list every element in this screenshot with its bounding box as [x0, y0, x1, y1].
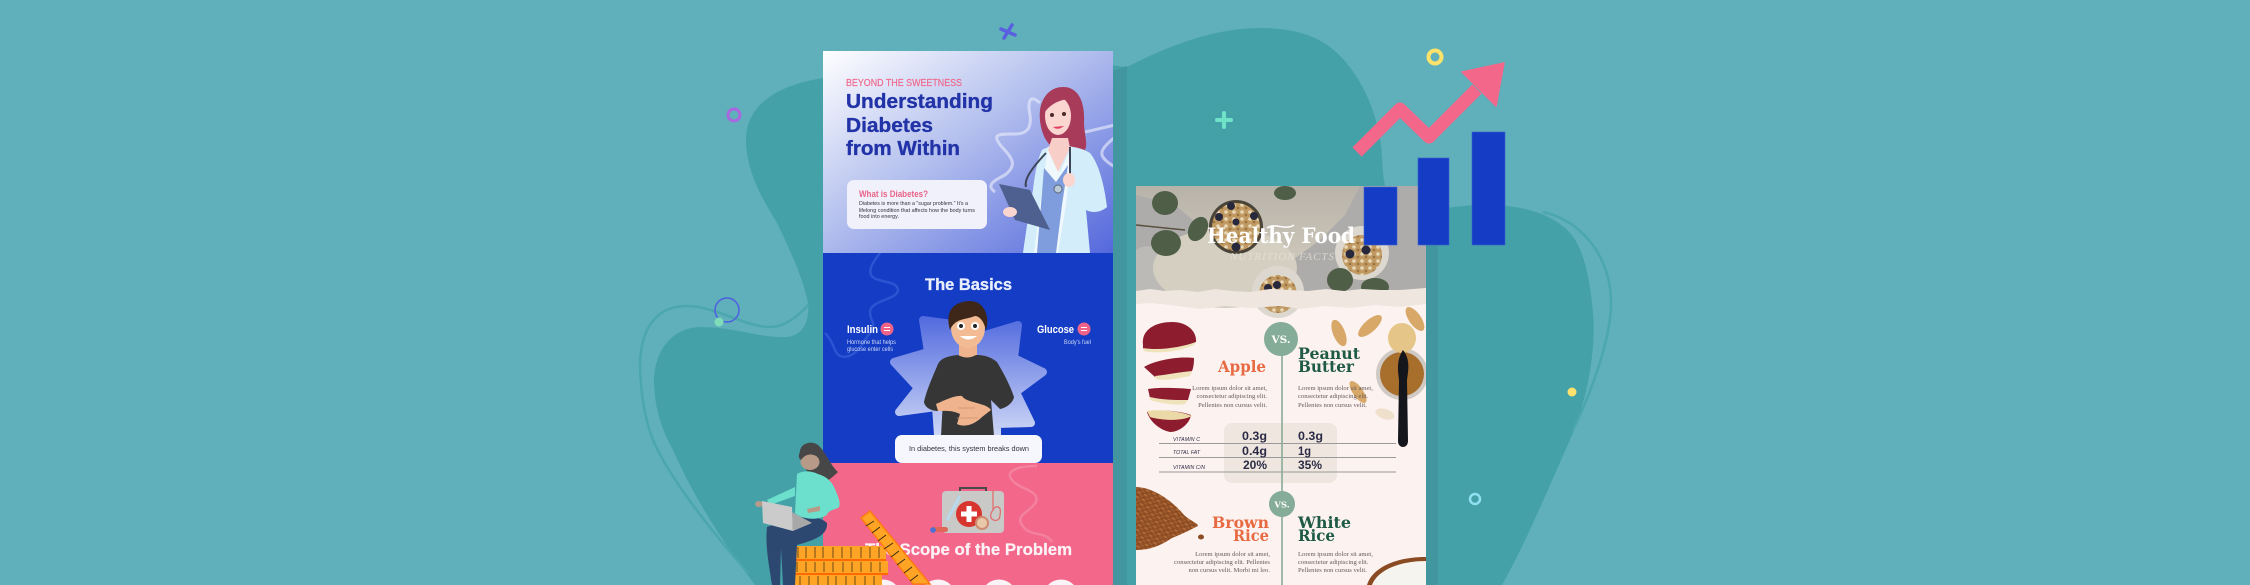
- callout: system breaks down: [895, 435, 1042, 463]
- text: white rice description: Lorem ipsum dolor sit amet,: [1298, 551, 1373, 558]
- table labels: VITAMIN C: [1173, 437, 1200, 443]
- heading: apple: Apple: [1217, 357, 1266, 376]
- heading: peanut butter: [1298, 348, 1360, 372]
- panel: the scope of the problem: [823, 463, 1113, 585]
- heading: peanut butter: Peanut: [1298, 344, 1361, 363]
- table values: 0.3g: [1242, 429, 1267, 443]
- text: white rice description: consectetur adipiscing elit.: [1298, 559, 1369, 566]
- title: Diabetes: [846, 115, 933, 137]
- shadow strips: [1113, 66, 1438, 585]
- panel: diabetes infographic card: [823, 51, 1115, 585]
- icon: peanuts: [1331, 307, 1424, 420]
- icon: vs badge: VS.: [1270, 334, 1291, 346]
- coin stack: [792, 546, 888, 585]
- label: glucose: [1037, 322, 1091, 346]
- background outline right: [1543, 212, 1611, 430]
- icon: vs badge small: [1269, 491, 1295, 517]
- eyebrow: BEYOND THE SWEETNESS: [846, 78, 962, 89]
- heading: white rice: Rice: [1298, 526, 1335, 545]
- label: insulin: Hormone that helps: [847, 340, 896, 346]
- figure: [755, 443, 840, 585]
- callout: what is diabetes: lifelong condition that affects how the body turns: [859, 208, 975, 214]
- text: brown rice description: Lorem ipsum dolor sit amet,: [1195, 551, 1270, 558]
- icon: first aid kit: [930, 488, 1004, 533]
- illustration: man: [924, 301, 1014, 436]
- icon: vs badge: [1264, 322, 1298, 356]
- icon: brown rice: [1136, 487, 1204, 550]
- icon: peanut butter bowl: [1376, 323, 1428, 447]
- icon: vs badge small: VS.: [1273, 500, 1290, 510]
- icon: apple slices: [1143, 322, 1196, 432]
- callout: system breaks down: In diabetes, this system breaks down: [909, 444, 1029, 453]
- ruler: [861, 511, 930, 584]
- text: peanut butter description: consectetur adipiscing elit.: [1298, 393, 1369, 400]
- torn paper edge: [1136, 288, 1426, 309]
- arrow: rising trend: [1357, 63, 1504, 152]
- table values: [1242, 432, 1322, 469]
- heading: white rice: White: [1297, 513, 1351, 532]
- title: healthy food: Healthy Food: [1207, 223, 1355, 248]
- table values: 0.3g: [1298, 429, 1323, 443]
- callout: what is diabetes: [847, 180, 987, 229]
- callout: what is diabetes: food into energy.: [859, 214, 899, 220]
- illustration: woman on coins: [755, 443, 930, 585]
- divider line: [1281, 355, 1283, 585]
- text: brown rice description: consectetur adipiscing elit. Pellentes: [1174, 559, 1270, 566]
- chart: rising bars: [1364, 132, 1505, 245]
- label: glucose: Body's fuel: [1064, 340, 1091, 346]
- heading: brown rice: [1212, 516, 1269, 541]
- decorative star outline: [991, 99, 1115, 192]
- decorative shapes: [714, 25, 1576, 504]
- table labels: TOTAL FAT: [1173, 450, 1201, 456]
- text: peanut butter description: [1298, 386, 1372, 407]
- photo header: [1136, 186, 1426, 318]
- label: insulin: Insulin: [847, 324, 878, 336]
- title: healthy food: [1208, 224, 1354, 260]
- callout: what is diabetes: Diabetes is more than a "sugar problem." It's a: [859, 201, 969, 207]
- table values: 1g: [1298, 444, 1311, 458]
- callout: what is diabetes: What is Diabetes?: [859, 189, 928, 200]
- table labels: VITAMIN C/N: [1173, 465, 1205, 471]
- text: white rice description: Pellentes non cursus velit.: [1298, 567, 1367, 574]
- title: Understanding: [846, 91, 993, 113]
- heading: The Scope of the Problem: [865, 540, 1072, 559]
- table values: 20%: [1243, 458, 1267, 472]
- stat icons: [870, 579, 1074, 585]
- text: peanut butter description: Lorem ipsum dolor sit amet,: [1298, 385, 1373, 392]
- background outline left: [640, 304, 809, 573]
- heading: brown rice: Brown: [1212, 513, 1269, 532]
- text: apple description: Pellentes non cursus velit.: [1198, 402, 1267, 409]
- text: apple description: [1192, 386, 1267, 407]
- text: brown rice description: non cursus velit. Morbi mi leo.: [1188, 567, 1270, 574]
- text: apple description: consectetur adipiscing elit.: [1196, 393, 1267, 400]
- illustration: doctor: [999, 87, 1107, 253]
- text: white rice description: [1298, 551, 1373, 574]
- icon: white rice bowl: [1367, 557, 1426, 585]
- table labels: [1173, 437, 1205, 471]
- wiggle decoration: [1010, 466, 1052, 542]
- table values: 0.4g: [1242, 444, 1267, 458]
- background blob: [654, 28, 1594, 585]
- table values: 35%: [1298, 458, 1322, 472]
- label: glucose: Glucose: [1037, 324, 1074, 336]
- label: insulin: [847, 322, 896, 353]
- title: from Within: [846, 138, 960, 160]
- text: brown rice description: [1174, 551, 1270, 574]
- nutrition table: [1159, 423, 1396, 483]
- text: apple description: Lorem ipsum dolor sit amet,: [1192, 385, 1267, 392]
- label: insulin: glucose enter cells: [847, 347, 893, 353]
- title: [846, 91, 993, 160]
- starburst: [894, 320, 1043, 435]
- title: healthy food: NUTRITION FACTS: [1229, 251, 1334, 263]
- heading: The Basics: [925, 276, 1012, 294]
- text: peanut butter description: Pellentes non cursus velit.: [1298, 402, 1367, 409]
- heading: peanut butter: Butter: [1298, 357, 1355, 376]
- heading: brown rice: Rice: [1233, 526, 1269, 545]
- panel: diabetes header: [823, 51, 1115, 253]
- panel: the basics: [823, 250, 1113, 463]
- heading: white rice: [1298, 516, 1350, 541]
- wiggle decoration: [825, 250, 898, 357]
- panel: healthy food card: [1136, 186, 1428, 585]
